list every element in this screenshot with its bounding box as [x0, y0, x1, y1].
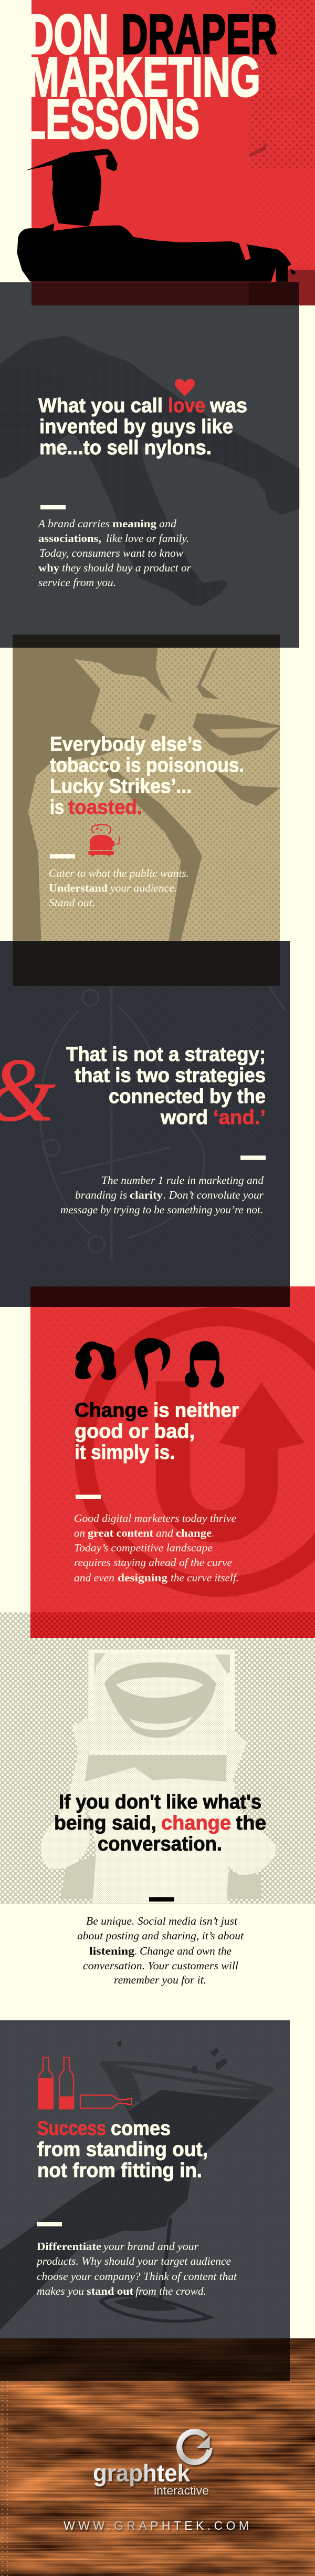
icon: toaster — [88, 825, 120, 856]
body text — [60, 1174, 264, 1216]
halftone strip dense — [249, 0, 315, 168]
body text: message by trying to be something you’re not. — [60, 1203, 263, 1216]
body text: Stand out. — [49, 896, 95, 909]
body text: associations, — [38, 532, 101, 545]
body text: service from you. — [38, 576, 116, 589]
heading — [54, 1791, 266, 1855]
body text — [74, 1512, 239, 1584]
title: DON — [27, 3, 109, 66]
photo dark shapes — [13, 648, 280, 941]
body text: . — [135, 1945, 137, 1957]
panel: strategy — [0, 941, 290, 1307]
heading — [66, 1044, 266, 1129]
icon: heart — [175, 379, 195, 396]
divider bar — [76, 1495, 101, 1499]
divider bar — [240, 1156, 266, 1160]
divider bar — [40, 505, 66, 509]
body text: your audience. — [109, 882, 177, 894]
website url: WWW.GRAPHTEK.COM — [64, 2519, 249, 2532]
body text: and even — [74, 1571, 114, 1584]
body text: . — [212, 1527, 214, 1539]
heading: love — [168, 395, 205, 417]
body text: clarity — [130, 1189, 163, 1201]
body text: Differentiate — [37, 2240, 101, 2253]
halftone legs — [0, 335, 299, 606]
heading: is — [50, 796, 64, 819]
panel background — [0, 2020, 290, 2338]
panel background — [30, 1286, 315, 1638]
heading: invented by guys like — [39, 416, 233, 438]
body text: branding is — [75, 1189, 127, 1201]
heading: Lucky Strikes’... — [50, 775, 192, 798]
dotted edge — [0, 2381, 8, 2576]
halftone photo of person holding smile sign — [41, 1650, 276, 1903]
body text: like love or family. — [106, 532, 189, 545]
body text: makes you — [37, 2285, 84, 2297]
heading: toasted. — [68, 796, 142, 819]
heading: is neither — [153, 1399, 239, 1422]
smudge — [249, 142, 266, 158]
body text: Be unique. Social media isn’t just — [86, 1915, 238, 1927]
photo overlap band — [13, 941, 280, 986]
body text: on — [74, 1527, 85, 1539]
body text: change — [176, 1527, 212, 1539]
heading: conversation. — [98, 1833, 222, 1855]
panel: conversation — [0, 1612, 315, 1986]
heading: was — [209, 395, 247, 417]
halftone background — [0, 1612, 315, 1904]
body text: Today’s competitive landscape — [74, 1541, 213, 1554]
body text: the curve itself. — [171, 1571, 239, 1584]
heading — [50, 733, 244, 819]
heading: change — [161, 1812, 231, 1834]
panel: tobacco — [13, 635, 280, 941]
heading: from standing out, — [37, 2139, 208, 2161]
body text: Today, consumers want to know — [39, 547, 183, 559]
panel: footer wood — [0, 2338, 315, 2576]
divider bar — [50, 854, 75, 858]
heading: being said, — [54, 1812, 156, 1834]
heading: tobacco is poisonous. — [50, 754, 244, 776]
body text — [49, 867, 189, 909]
heading — [75, 1399, 239, 1464]
silhouette of man with graduation cap — [17, 149, 296, 282]
heading: That is not a strategy; — [66, 1044, 266, 1066]
heading — [38, 395, 247, 459]
body text: your brand and your — [102, 2240, 199, 2253]
body text: and — [156, 1527, 174, 1539]
body text: from the crowd. — [135, 2285, 206, 2297]
mouth inner — [210, 728, 280, 738]
panel: success — [0, 2020, 290, 2338]
dark red lower corner — [276, 270, 315, 305]
heading: What you call — [38, 395, 163, 417]
heading: good or bad, — [75, 1420, 195, 1443]
panel: change — [30, 1286, 315, 1638]
background ring and arrow — [84, 1317, 315, 1587]
body text: choose your company? Think of content that — [37, 2270, 237, 2283]
hero overlap band — [32, 282, 249, 305]
panel: hero — [17, 0, 315, 305]
body text: The number 1 rule in marketing and — [101, 1174, 264, 1187]
hero red background — [32, 0, 315, 305]
body text: designing — [118, 1571, 168, 1584]
wood texture — [0, 2338, 315, 2576]
heading: word — [160, 1107, 208, 1129]
body text: about posting and sharing, it’s about — [77, 1929, 244, 1942]
photo light base — [13, 648, 280, 941]
body text: A brand carries — [37, 517, 110, 530]
body text: Change and own the — [140, 1945, 232, 1957]
martini glass photo — [0, 2040, 274, 2330]
body text: and — [159, 517, 177, 530]
body text — [37, 517, 192, 589]
divider bar — [37, 2222, 62, 2226]
heading: me...to sell nylons. — [39, 437, 212, 459]
panel background — [0, 305, 299, 648]
overlap band — [0, 2338, 290, 2381]
body text — [36, 2240, 237, 2297]
panel background left strip — [0, 282, 32, 305]
body text: why — [38, 561, 60, 574]
body text: they should buy a product or — [62, 561, 192, 574]
heading: If you don't like what's — [59, 1791, 261, 1813]
body text: stand out — [87, 2285, 133, 2297]
logo tagline: interactive — [154, 2484, 209, 2497]
heading: the — [236, 1812, 266, 1834]
red overlap band — [30, 1612, 315, 1638]
heading: that is two strategies — [75, 1065, 266, 1087]
divider bar — [149, 1897, 174, 1902]
heading: Everybody else’s — [50, 733, 202, 755]
body text: meaning — [112, 517, 157, 530]
body text: requires staying ahead of the curve — [74, 1556, 232, 1569]
heading — [37, 2118, 208, 2182]
heading: Change — [75, 1399, 148, 1422]
body text: Good digital marketers today thrive — [74, 1512, 236, 1525]
logo wordmark: graphtek — [93, 2459, 190, 2487]
heading: Success — [37, 2118, 106, 2140]
body text: products. Why should your target audience — [36, 2255, 231, 2267]
title: LESSONS — [23, 87, 200, 150]
heading: not from fitting in. — [37, 2160, 202, 2182]
photo overlap band top — [13, 635, 280, 648]
body text: great content — [88, 1527, 153, 1539]
body text: Understand — [49, 882, 108, 894]
title — [32, 14, 277, 140]
body text — [77, 1915, 244, 1986]
faint play diagram — [40, 987, 285, 1262]
panel: love — [0, 282, 299, 648]
icon: bottles — [38, 2058, 132, 2109]
logo: graphtek G — [180, 2431, 213, 2462]
body text: remember you for it. — [114, 1974, 206, 1986]
overlap band with strategy panel — [30, 1286, 290, 1307]
body text: Cater to what the public wants. — [49, 867, 189, 880]
body text: . Don’t convolute your — [163, 1189, 264, 1201]
hero overlap band right — [249, 282, 299, 305]
body text: listening — [89, 1945, 135, 1957]
halftone strip light — [249, 168, 315, 271]
panel background — [0, 941, 290, 1307]
icons: hair styles — [75, 1338, 224, 1391]
heading: comes — [111, 2118, 171, 2140]
body text: conversation. Your customers will — [83, 1959, 238, 1972]
heading: it simply is. — [75, 1442, 175, 1464]
heading: ‘and.’ — [213, 1107, 266, 1129]
heading: connected by the — [109, 1086, 266, 1108]
